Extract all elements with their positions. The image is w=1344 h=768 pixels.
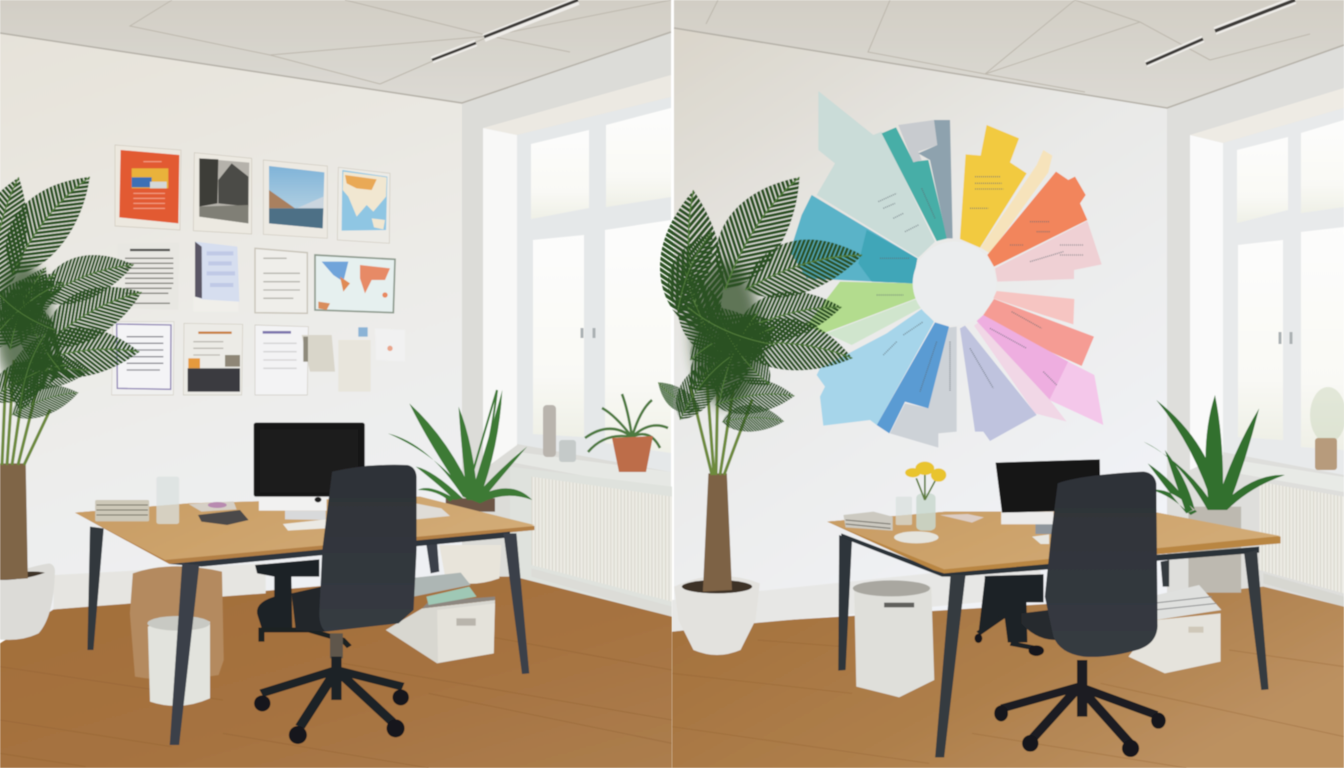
cabinet and stack — [1128, 585, 1221, 673]
white bin — [853, 580, 934, 697]
poster: text page — [117, 243, 179, 310]
window bay wall — [462, 32, 671, 620]
poster wall — [112, 145, 405, 395]
chair — [975, 472, 1166, 757]
radiator and floor — [672, 395, 1344, 768]
wedge: magenta pink — [977, 315, 1068, 400]
left room sill plant overlay — [472, 390, 497, 480]
wedge: pale pink narrow — [974, 320, 1067, 422]
palm pot — [0, 563, 55, 640]
window recess — [1190, 88, 1344, 492]
baseboards — [672, 567, 1344, 632]
wedge: pale green — [827, 298, 923, 345]
right palm — [649, 156, 867, 475]
wheel center circle — [913, 242, 996, 325]
baseboards — [54, 563, 672, 617]
wedge: lavender — [960, 326, 1037, 441]
wedge: light grey — [898, 120, 937, 162]
front desk leg — [170, 563, 199, 745]
wedge: pale pink — [995, 221, 1102, 282]
wedge: orange — [987, 172, 1087, 267]
wheel small annotations — [877, 177, 1083, 392]
poster: framed text — [255, 248, 307, 313]
poster: orange — [115, 145, 181, 230]
monitor — [996, 459, 1101, 534]
window recess — [483, 75, 671, 472]
ceiling — [674, 0, 1344, 108]
palm trunk — [703, 473, 732, 592]
back plant pot — [439, 498, 501, 584]
palm trunk — [0, 463, 28, 580]
floor — [0, 577, 672, 768]
back wall — [0, 30, 462, 640]
desk items — [95, 477, 450, 531]
yellow flowers — [905, 462, 946, 482]
far desk leg — [1161, 560, 1169, 587]
desk — [75, 497, 534, 674]
palm pot — [674, 576, 760, 655]
wedge: teal blue inner tone — [858, 230, 917, 283]
poster: white sheet — [255, 325, 308, 395]
floor boards — [672, 640, 1344, 768]
wedge: coral — [980, 299, 1094, 366]
wedge: blush — [993, 291, 1074, 324]
far side desk leg — [426, 543, 439, 573]
wedge: teal blue — [790, 195, 917, 283]
wedge: light pink — [1049, 362, 1103, 425]
floor — [672, 587, 1344, 768]
wedge: blue — [877, 322, 949, 433]
wedge: slate grey — [918, 120, 953, 238]
panel: right room, after — [649, 0, 1344, 768]
desk — [827, 512, 1281, 690]
bin — [147, 616, 210, 706]
wheel chart on wall — [790, 91, 1103, 448]
wedge: sky — [817, 309, 934, 426]
wedge: cream — [981, 150, 1052, 253]
poster: purple border sheet — [112, 322, 174, 395]
poster: mountain lake — [263, 160, 327, 238]
poster: dark block sheet — [183, 323, 243, 395]
wedge: yellow — [960, 125, 1027, 248]
panel: left room, before — [0, 0, 672, 768]
poster: curling mottled map — [193, 242, 239, 312]
cabinet and books — [386, 573, 495, 663]
poster: world map — [315, 255, 395, 313]
wedge: green — [807, 282, 916, 333]
monitor — [254, 423, 365, 520]
desk items — [843, 473, 1049, 544]
radiator — [1259, 482, 1344, 593]
back plant leaves — [388, 390, 532, 503]
wedge: grey — [890, 327, 957, 448]
poster: monochrome forest — [193, 153, 252, 234]
wedge: pale sage — [817, 91, 935, 258]
radiator — [510, 467, 672, 630]
front desk leg — [935, 575, 966, 757]
floor boards — [0, 633, 672, 768]
corner plant — [1143, 395, 1285, 515]
wedge: teal — [882, 127, 947, 241]
back wall — [674, 28, 1167, 660]
chair — [254, 465, 417, 744]
paper scraps — [302, 327, 405, 392]
lower room — [0, 390, 672, 768]
left palm — [0, 155, 149, 465]
poster: asia map — [337, 167, 390, 243]
ceiling — [0, 0, 671, 104]
sill and sill objects — [510, 394, 671, 492]
silver pot — [1188, 507, 1241, 593]
wicker basket — [130, 566, 224, 680]
window bay wall — [1167, 45, 1344, 640]
